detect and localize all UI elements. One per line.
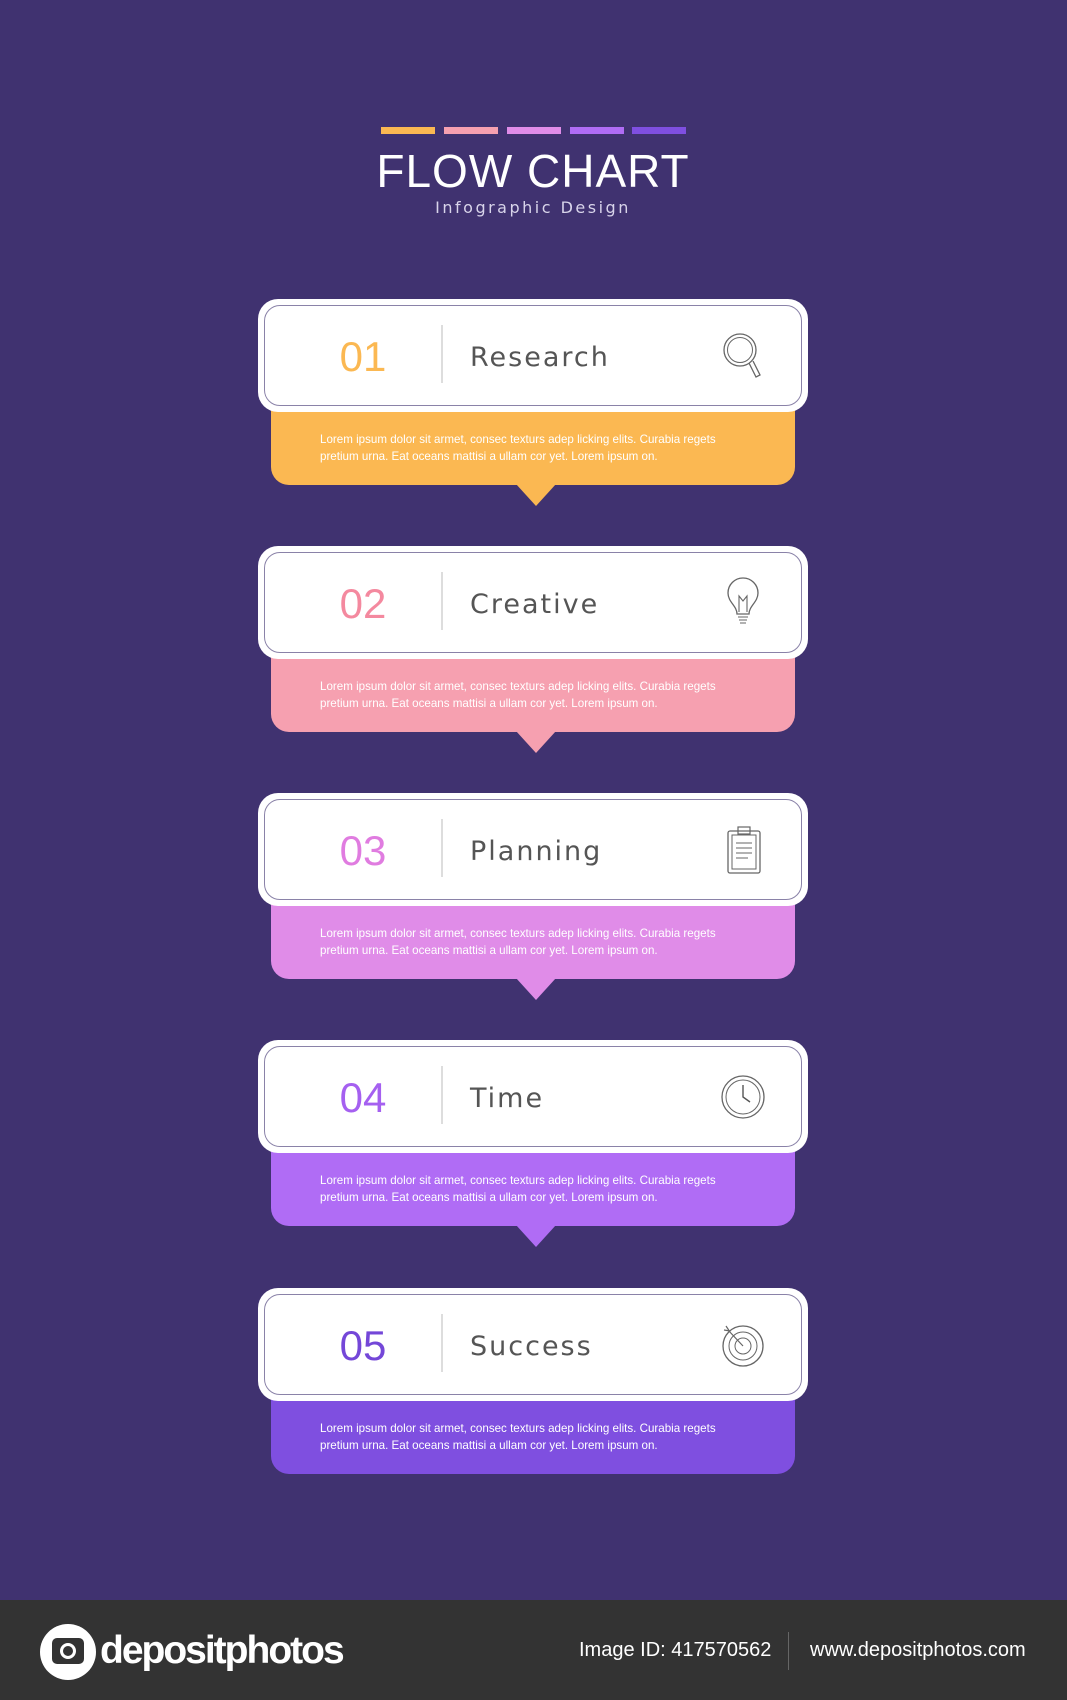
description 01 [271, 394, 795, 485]
card 02: 02 [340, 580, 386, 627]
icon: clock [721, 1075, 765, 1119]
card 01: 01 [340, 333, 386, 380]
card 01: Research [470, 342, 610, 373]
icon: target [722, 1325, 764, 1367]
description 04 [271, 1135, 795, 1226]
title bars [381, 127, 686, 134]
subtitle: Infographic Design [435, 198, 631, 217]
step 02 [258, 546, 808, 753]
card 03: Planning [470, 836, 602, 867]
footer image id: Image ID: 417570562 [579, 1639, 771, 1661]
description 02: pretium urna. Eat oceans mattisi a ullam cor yet. Lorem ipsum on. [320, 697, 658, 710]
card 05 [258, 1288, 808, 1401]
card 01 [258, 299, 808, 412]
card 02: Creative [470, 589, 599, 620]
card 03: 03 [340, 827, 386, 874]
description 03: Lorem ipsum dolor sit armet, consec texturs adep licking elits. Curabia regets [320, 927, 716, 940]
icon: magnifier [723, 333, 761, 378]
description 03 [271, 888, 795, 979]
icon: bulb [727, 577, 759, 624]
card 02 [258, 546, 808, 659]
description 01: Lorem ipsum dolor sit armet, consec texturs adep licking elits. Curabia regets [320, 433, 716, 446]
title: FLOW CHART [376, 145, 690, 197]
card 05: 05 [340, 1322, 386, 1369]
description 05 [271, 1383, 795, 1474]
card 05: Success [470, 1331, 593, 1362]
card 03 [258, 793, 808, 906]
icon: clipboard [727, 826, 761, 874]
card 04 [258, 1040, 808, 1153]
description 03: pretium urna. Eat oceans mattisi a ullam cor yet. Lorem ipsum on. [320, 944, 658, 957]
footer logo [40, 1624, 344, 1680]
description 02 [271, 641, 795, 732]
footer url: www.depositphotos.com [810, 1639, 1026, 1661]
description 01: pretium urna. Eat oceans mattisi a ullam cor yet. Lorem ipsum on. [320, 450, 658, 463]
description 02: Lorem ipsum dolor sit armet, consec texturs adep licking elits. Curabia regets [320, 680, 716, 693]
description 05: pretium urna. Eat oceans mattisi a ullam cor yet. Lorem ipsum on. [320, 1439, 658, 1452]
footer logo: depositphotos [100, 1629, 343, 1672]
step 05 [258, 1288, 808, 1474]
card 04: 04 [340, 1074, 386, 1121]
card 04: Time [470, 1083, 544, 1114]
step 01 [258, 299, 808, 506]
step 03 [258, 793, 808, 1000]
description 04: pretium urna. Eat oceans mattisi a ullam cor yet. Lorem ipsum on. [320, 1191, 658, 1204]
step 04 [258, 1040, 808, 1247]
footer [0, 1600, 1067, 1700]
description 04: Lorem ipsum dolor sit armet, consec texturs adep licking elits. Curabia regets [320, 1174, 716, 1187]
description 05: Lorem ipsum dolor sit armet, consec texturs adep licking elits. Curabia regets [320, 1422, 716, 1435]
